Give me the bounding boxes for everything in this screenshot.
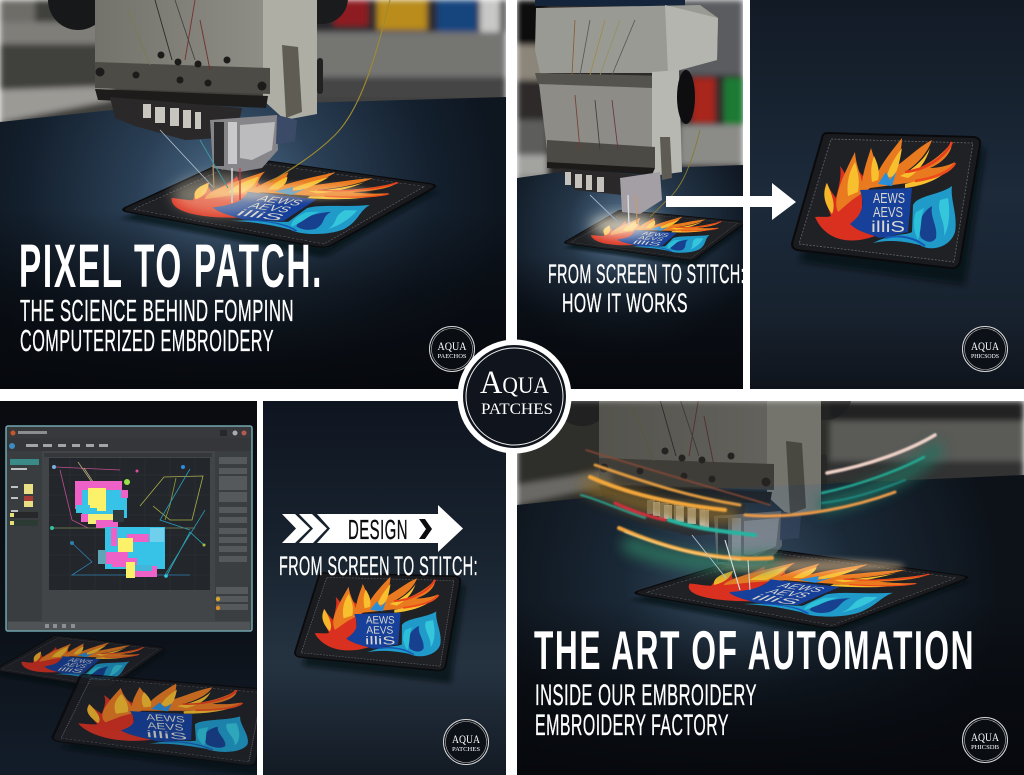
- heading: FROM SCREEN TO STITCH:: [548, 259, 745, 289]
- glow under the needle: [591, 215, 659, 237]
- subtitle: EMBROIDERY FACTORY: [535, 709, 729, 742]
- panel: design step: [263, 401, 506, 775]
- small logo: [962, 718, 1008, 762]
- subtitle: INSIDE OUR EMBROIDERY: [535, 679, 757, 712]
- warm light over the flames: [200, 184, 370, 200]
- subtitle: COMPUTERIZED EMBROIDERY: [20, 323, 274, 358]
- patch: [292, 573, 469, 683]
- subtitle: [535, 679, 757, 742]
- fabric background: [750, 0, 1024, 389]
- small logo: AQUA: [452, 732, 480, 746]
- small chevron: [419, 519, 432, 539]
- heading: [549, 264, 743, 312]
- small logo: PATCHES: [452, 746, 480, 753]
- subtitle: THE SCIENCE BEHIND FOMPINN: [20, 293, 294, 328]
- panel: from screen to stitch: [517, 0, 750, 389]
- machine head: [535, 0, 718, 214]
- arrow: design: [282, 505, 463, 552]
- small logo: AQUA: [971, 339, 999, 353]
- fabric surface: [517, 475, 1024, 775]
- heading: HOW IT WORKS: [562, 288, 688, 318]
- small logo: PHICSODS: [971, 353, 999, 360]
- small logo: PHICSDB: [971, 744, 1000, 751]
- patch: rear: [0, 635, 164, 688]
- needles and threads: [590, 130, 700, 226]
- small logo: [962, 326, 1008, 372]
- background: [0, 401, 257, 775]
- small logo: [444, 720, 488, 764]
- fabric background: [263, 401, 506, 775]
- subtitle: [20, 300, 292, 352]
- workshop background: [517, 401, 1024, 511]
- panel: finished patch: [750, 0, 1024, 389]
- workshop background: [0, 0, 506, 125]
- machine head, dimmed by motion: [552, 366, 852, 568]
- small logo: [430, 326, 474, 372]
- patch: front: [52, 674, 257, 775]
- panel: art of automation: [517, 366, 1024, 775]
- workshop background: [517, 0, 744, 180]
- needles: [692, 535, 750, 590]
- heading: FROM SCREEN TO STITCH:: [279, 551, 478, 581]
- title: PIXEL TO PATCH.: [19, 232, 323, 300]
- patch being stitched: [564, 210, 743, 266]
- small logo: AQUA: [438, 339, 467, 353]
- central logo badge: PATCHES: [481, 401, 553, 418]
- software window: [6, 426, 252, 631]
- panel: pixel to patch: [0, 0, 506, 389]
- patch: [603, 544, 980, 640]
- fabric surface: [0, 97, 506, 389]
- arrow: screen to finished patch: [666, 183, 796, 220]
- small logo: PAECHOS: [438, 353, 467, 360]
- warm light over the flames: [715, 559, 905, 573]
- patch being stitched: [122, 160, 436, 258]
- patch: [792, 133, 985, 285]
- central logo badge: AQUA: [480, 365, 549, 401]
- motion streaks: [581, 435, 935, 563]
- small logo: AQUA: [971, 730, 999, 744]
- fabric surface: [517, 165, 743, 389]
- panel: digitizing software: [0, 401, 257, 775]
- design canvas: [49, 458, 210, 590]
- glow under the needle: [172, 175, 272, 215]
- bright mechanism highlights: [653, 502, 709, 528]
- embroidery pixel clusters: [75, 481, 165, 578]
- machine head: [48, 0, 348, 172]
- arrow label: DESIGN: [348, 514, 408, 545]
- needles and threads: [160, 0, 390, 203]
- central logo badge: [458, 340, 572, 454]
